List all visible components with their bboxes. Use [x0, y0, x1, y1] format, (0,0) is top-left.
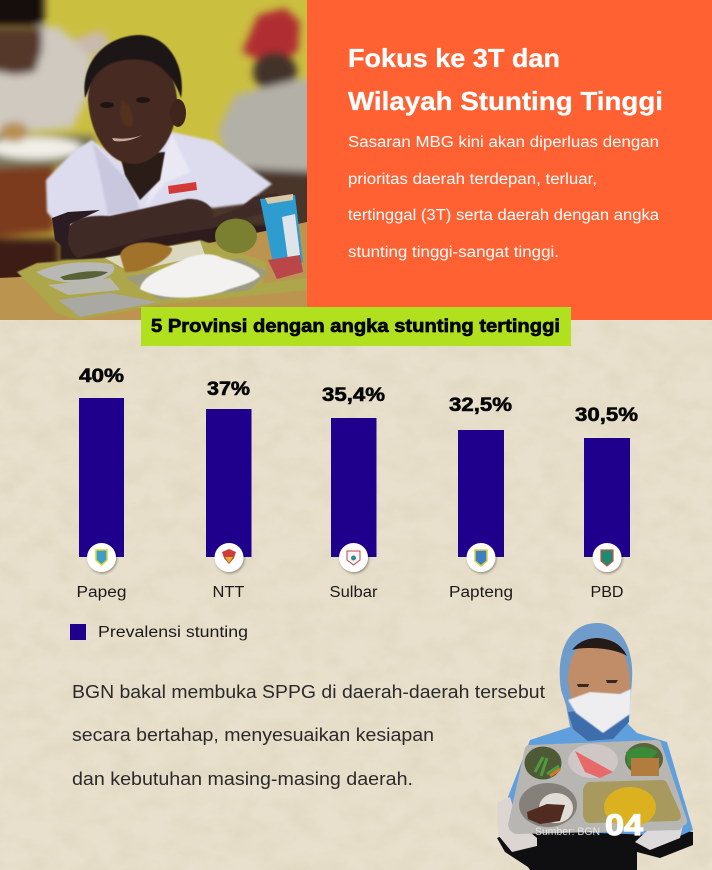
title — [348, 43, 663, 116]
boy shirt — [46, 132, 272, 228]
closing paragraph: secara bertahap, menyesuaikan kesiapan — [72, 725, 434, 745]
black shirt — [497, 825, 693, 870]
bar: Papeg — [76, 365, 126, 601]
bar: Sulbar — [322, 384, 385, 601]
orange fruit — [215, 218, 257, 254]
source credit: Sumber: BGN — [535, 826, 600, 838]
title: Wilayah Stunting Tinggi — [348, 86, 663, 116]
milk carton — [260, 194, 303, 279]
bar: NTT: NTT — [212, 584, 245, 601]
bar: Papteng: 32,5% — [449, 394, 512, 416]
meat compartment — [519, 783, 577, 827]
face mask — [568, 689, 631, 733]
bar: Sulbar: 35,4% — [322, 384, 385, 406]
chart heading banner — [141, 307, 571, 346]
intro paragraph — [348, 134, 659, 261]
bar: NTT — [206, 378, 252, 601]
vegetable compartment — [524, 746, 562, 780]
hijab — [560, 623, 632, 740]
title: Fokus ke 3T dan — [348, 43, 560, 73]
meal tray — [17, 240, 307, 320]
intro paragraph: stunting tinggi-sangat tinggi. — [348, 244, 559, 261]
gloves — [497, 797, 537, 852]
bar: PBD: 30,5% — [575, 404, 638, 426]
page number: 04 — [605, 809, 643, 842]
fruit compartment — [568, 744, 618, 778]
chart heading banner: 5 Provinsi dengan angka stunting tertinggi — [151, 315, 560, 336]
bar chart — [76, 365, 638, 601]
bar: Papteng — [449, 394, 513, 601]
intro paragraph: prioritas daerah terdepan, terluar, — [348, 171, 597, 188]
rice — [140, 254, 260, 298]
closing paragraph: dan kebutuhan masing-masing daerah. — [72, 769, 413, 789]
closing paragraph — [72, 682, 545, 789]
boy body behind arms — [60, 225, 280, 260]
intro paragraph: Sasaran MBG kini akan diperluas dengan — [348, 134, 659, 151]
photo: schoolboy with meal tray — [0, 0, 320, 320]
yellow rice compartment — [583, 780, 681, 823]
fried side dish — [120, 242, 172, 272]
light-blue uniform — [508, 723, 693, 836]
bar: Papeg: 40% — [79, 365, 124, 387]
closing paragraph: BGN bakal membuka SPPG di daerah-daerah tersebut — [72, 682, 545, 702]
bar: Papteng: Papteng — [449, 584, 513, 601]
chart legend: Prevalensi stunting — [98, 624, 248, 641]
panel: orange header — [307, 0, 712, 320]
tempeh and greens compartment — [625, 743, 663, 775]
face — [568, 638, 630, 705]
intro paragraph: tertinggal (3T) serta daerah dengan angka — [348, 207, 659, 224]
boy head — [120, 152, 165, 200]
wooden table — [0, 222, 307, 320]
bar: PBD: PBD — [590, 584, 624, 601]
photo: worker holding meal tray — [497, 623, 693, 870]
bar: Papeg: Papeg — [76, 584, 126, 601]
steel tray — [508, 740, 687, 834]
bar: PBD — [575, 404, 638, 601]
boy arms — [67, 193, 280, 258]
bar: NTT: 37% — [207, 378, 250, 400]
bar: Sulbar: Sulbar — [330, 584, 378, 601]
